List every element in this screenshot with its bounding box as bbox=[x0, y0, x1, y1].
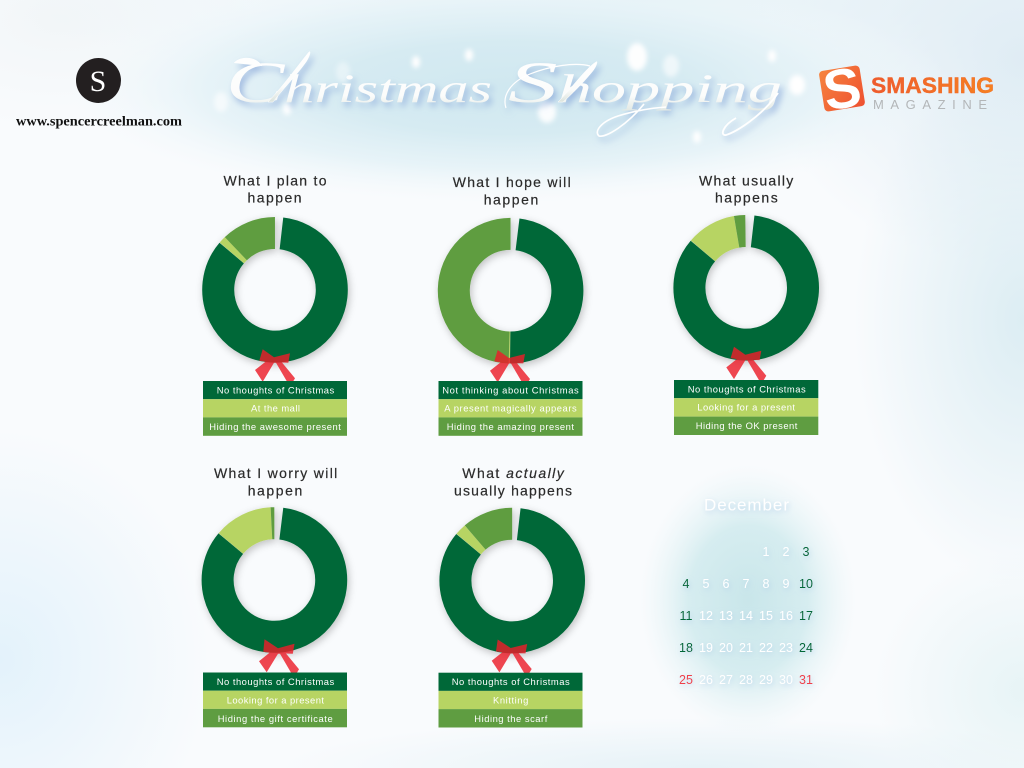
icon: bow bbox=[492, 640, 532, 677]
S monogram badge: S bbox=[90, 65, 106, 98]
date grid: 5 bbox=[703, 577, 710, 591]
icon: bow bbox=[259, 639, 299, 678]
date grid: 15 bbox=[759, 609, 773, 623]
heading bbox=[224, 172, 327, 206]
date grid: 17 bbox=[799, 609, 813, 623]
panel: what I plan to happen bbox=[195, 172, 355, 436]
date grid: 3 bbox=[803, 545, 810, 559]
date grid: 6 bbox=[723, 577, 730, 591]
icon: bow bbox=[255, 349, 295, 387]
legend: Hiding the OK present bbox=[696, 420, 798, 431]
donut chart bbox=[666, 208, 826, 368]
legend: A present magically appears bbox=[444, 403, 577, 414]
date grid: 29 bbox=[759, 673, 773, 687]
heading: What usually bbox=[699, 172, 793, 188]
heading: What I hope will bbox=[453, 174, 571, 190]
heading: happens bbox=[715, 190, 778, 206]
date grid: 19 bbox=[699, 641, 713, 655]
donut chart bbox=[447, 227, 574, 354]
donut chart bbox=[432, 500, 592, 661]
date grid: 2 bbox=[783, 545, 790, 559]
snowflakes bbox=[214, 43, 805, 143]
legend: Looking for a present bbox=[697, 402, 795, 413]
date grid: 13 bbox=[719, 609, 733, 623]
title bbox=[226, 50, 782, 136]
calendar: December bbox=[679, 496, 813, 687]
date grid: 25 bbox=[679, 673, 693, 687]
heading: happen bbox=[484, 192, 538, 208]
icon: bow bbox=[490, 350, 530, 387]
wordmark: SMASHING bbox=[871, 73, 994, 98]
donut chart bbox=[194, 500, 354, 660]
date grid: 4 bbox=[683, 577, 690, 591]
legend: Hiding the scarf bbox=[474, 713, 548, 724]
heading: usually happens bbox=[454, 482, 572, 498]
heading bbox=[453, 174, 571, 208]
legend bbox=[438, 673, 582, 728]
date grid: 1 bbox=[763, 545, 770, 559]
date grid: 30 bbox=[779, 673, 793, 687]
logo: spencer creelman bbox=[16, 58, 183, 128]
legend: Hiding the awesome present bbox=[209, 421, 341, 432]
date grid: 18 bbox=[679, 641, 693, 655]
legend: No thoughts of Christmas bbox=[688, 383, 806, 394]
S monogram badge bbox=[76, 58, 121, 103]
legend: Looking for a present bbox=[227, 695, 324, 706]
date grid: 7 bbox=[743, 577, 750, 591]
tagline: MAGAZINE bbox=[873, 97, 987, 112]
heading: What I plan to bbox=[224, 172, 327, 188]
legend bbox=[203, 672, 347, 727]
legend bbox=[674, 380, 818, 435]
heading bbox=[214, 465, 337, 498]
heading: What actually bbox=[462, 465, 565, 481]
date grid: 16 bbox=[779, 609, 793, 623]
legend bbox=[438, 381, 582, 436]
date grid: 20 bbox=[719, 641, 733, 655]
icon: bow bbox=[726, 347, 766, 384]
legend: Not thinking about Christmas bbox=[442, 384, 579, 395]
legend: No thoughts of Christmas bbox=[217, 676, 335, 687]
legend: Knitting bbox=[493, 695, 528, 706]
date grid: 10 bbox=[799, 577, 813, 591]
heading: What I worry will bbox=[214, 465, 337, 481]
legend: Hiding the amazing present bbox=[447, 421, 574, 432]
title: C hristmas bbox=[226, 50, 492, 115]
panel: what I worry will happen bbox=[194, 465, 354, 727]
legend bbox=[203, 381, 347, 436]
heading: happen bbox=[248, 190, 302, 206]
date grid: 22 bbox=[759, 641, 773, 655]
legend: At the mall bbox=[251, 403, 300, 414]
panel: what actually usually happens bbox=[432, 465, 592, 728]
month heading: December bbox=[704, 496, 789, 514]
date grid: 11 bbox=[680, 609, 693, 623]
heading bbox=[454, 465, 572, 498]
donut chart bbox=[195, 209, 355, 370]
legend: No thoughts of Christmas bbox=[452, 676, 570, 687]
date grid: 14 bbox=[739, 609, 753, 623]
heading: happen bbox=[248, 482, 302, 498]
website address: www.spencercreelman.com bbox=[16, 114, 183, 128]
date grid: 23 bbox=[779, 641, 793, 655]
date grid: 21 bbox=[739, 641, 753, 655]
legend: No thoughts of Christmas bbox=[217, 384, 335, 395]
panel: what usually happens bbox=[666, 172, 826, 435]
logo: smashing magazine bbox=[817, 54, 994, 123]
legend: Hiding the gift certificate bbox=[218, 713, 333, 724]
heading bbox=[699, 172, 793, 206]
date grid bbox=[679, 545, 813, 687]
date grid: 27 bbox=[719, 673, 733, 687]
title: S hopping bbox=[508, 50, 782, 115]
date grid: 26 bbox=[699, 673, 713, 687]
date grid: 8 bbox=[763, 577, 770, 591]
date grid: 28 bbox=[739, 673, 753, 687]
date grid: 12 bbox=[699, 609, 713, 623]
icon: smashing S: S bbox=[819, 54, 865, 123]
date grid: 31 bbox=[799, 673, 813, 687]
date grid: 9 bbox=[783, 577, 790, 591]
date grid: 24 bbox=[799, 641, 813, 655]
panel: what I hope will happen bbox=[438, 174, 582, 436]
